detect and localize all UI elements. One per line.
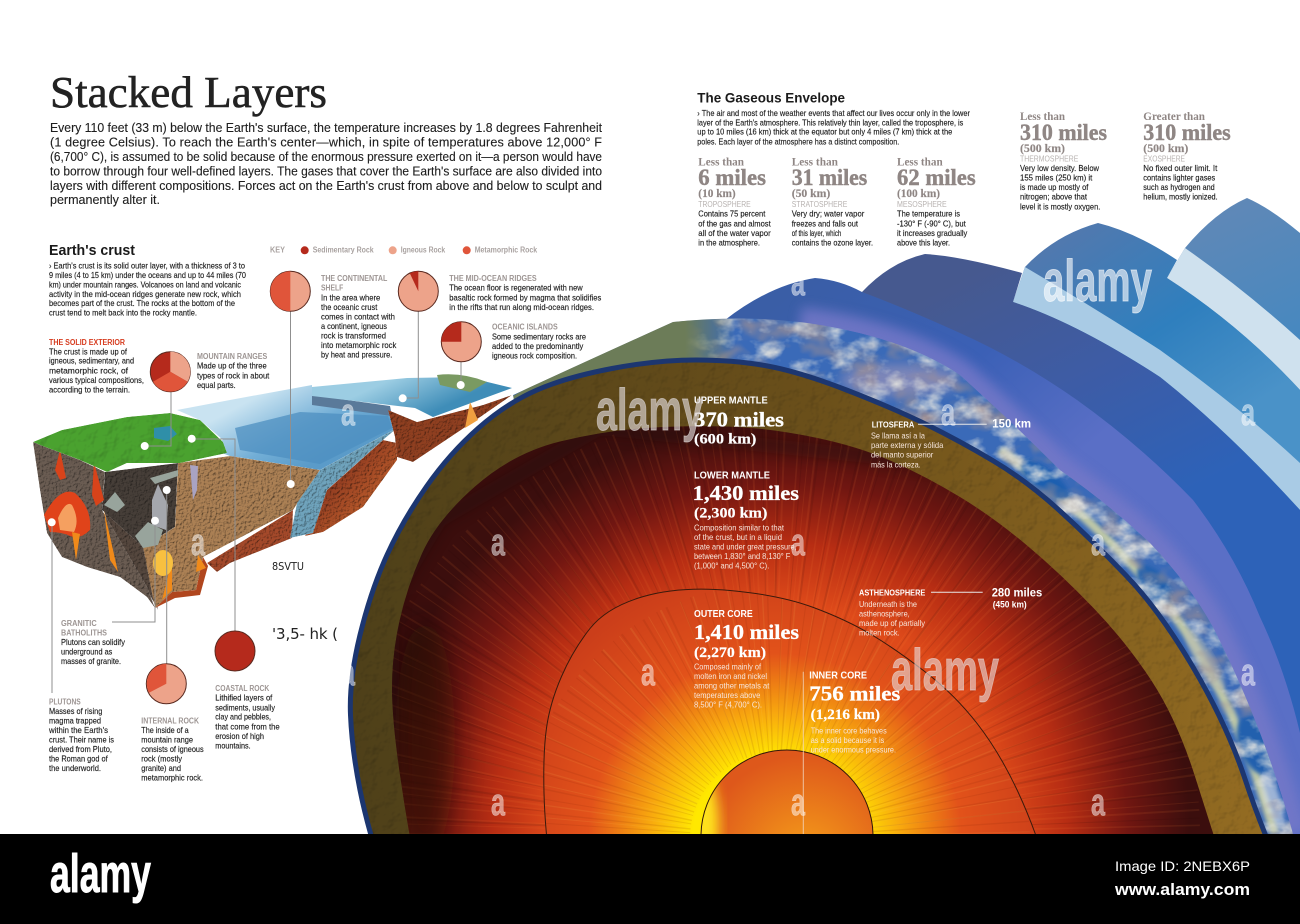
text: the solid exterior <box>49 338 144 394</box>
column: troposphere: in the atmosphere. <box>698 237 760 247</box>
label: asthenosphere: 280 miles <box>992 586 1043 600</box>
text: internal rock: granite) and <box>141 763 181 773</box>
label: litosfera: LITOSFERA <box>872 419 914 429</box>
watermark marks: a <box>341 392 356 434</box>
atmosphere layers <box>725 198 1300 834</box>
leader lines <box>52 311 461 693</box>
text: mountain ranges: types of rock in about <box>197 370 270 380</box>
text: internal rock: INTERNAL ROCK <box>141 716 199 725</box>
red rock underside <box>207 510 293 572</box>
label: lower mantle: of the crust, but in a liquid <box>694 532 782 542</box>
label: lower mantle: LOWER MANTLE <box>694 470 770 481</box>
label: asthenosphere: Underneath is the <box>859 599 917 609</box>
label: lower mantle: state and under great pressure, <box>694 542 797 552</box>
crust block illustration <box>33 374 512 610</box>
label: litosfera: más la corteza. <box>871 459 921 469</box>
label: asthenosphere: made up of partially <box>859 618 926 628</box>
text: gaseous envelope intro: up to 10 miles (16 km) thick at the equator but only 4 miles (7 km) thick at the <box>697 127 953 137</box>
pie: continental shelf <box>270 271 310 311</box>
atmosphere: thermosphere slice <box>1013 223 1300 463</box>
column: thermosphere: is made up mostly of <box>1020 182 1089 192</box>
column: thermosphere: (500 km) <box>1020 141 1065 155</box>
label: inner core: as a solid because it is <box>811 735 884 745</box>
column: mesosphere: above this layer. <box>897 237 950 247</box>
text: gaseous envelope intro <box>697 108 970 146</box>
text: internal rock <box>141 716 204 783</box>
text: internal rock: metamorphic rock. <box>141 773 203 783</box>
blue rim <box>350 360 1285 880</box>
label: upper mantle: 370 miles <box>694 408 784 432</box>
text: Earth's crust intro: 9 miles (4 to 15 km) under the oceans and up to 44 miles (70 <box>49 270 246 280</box>
text: Earth's crust intro: km) under mountain ranges. Volcanoes on land and volcanic <box>49 279 241 289</box>
text: the continental shelf: by heat and pressure. <box>321 350 392 360</box>
blue-gray shelf rim <box>290 428 397 538</box>
text: oceanic islands <box>492 323 586 361</box>
column: stratosphere: contains the ozone layer. <box>792 237 873 247</box>
key legend: Metamorphic Rock <box>475 246 538 255</box>
intro paragraph: permanently alter it. <box>50 193 160 207</box>
lake <box>154 426 177 441</box>
label: asthenosphere: asthenosphere, <box>859 609 910 619</box>
text: oceanic islands: igneous rock composition. <box>492 351 577 361</box>
text: coastal rock: clay and pebbles, <box>215 712 271 722</box>
text: granitic batholiths: GRANITIC <box>61 619 97 628</box>
atmosphere: exosphere light band <box>1167 248 1300 390</box>
watermark marks: a <box>1241 392 1256 434</box>
heading: the gaseous envelope: The Gaseous Envelope <box>697 89 845 105</box>
label: lower mantle: Composition similar to that <box>694 523 785 533</box>
intro paragraph <box>50 121 602 207</box>
granite slabs <box>104 465 198 548</box>
text: Earth's crust intro: crust tend to melt back into the rocky mantle. <box>49 308 197 318</box>
text: plutons <box>48 697 114 773</box>
label: inner core <box>803 671 900 834</box>
pie: mountain ranges <box>150 352 190 392</box>
inner core boundary line <box>700 750 874 834</box>
crust and upper mantle gold band <box>352 362 1262 834</box>
column: stratosphere: of this layer, which <box>792 228 842 238</box>
pie: oceanic islands <box>441 322 481 362</box>
watermark marks: a <box>791 782 806 824</box>
watermark marks: alamy <box>1043 249 1152 314</box>
text: the solid exterior: various typical compositions, <box>49 375 144 385</box>
column: mesosphere: (100 km) <box>897 186 940 200</box>
column: troposphere <box>698 156 771 247</box>
column: mesosphere: MESOSPHERE <box>897 200 947 209</box>
label: outer core: molten iron and nickel <box>694 671 767 681</box>
label: outer core: among other metals at <box>694 681 770 691</box>
watermark marks: a <box>641 652 656 694</box>
watermark marks: alamy <box>596 378 703 443</box>
text: the mid-ocean ridges: in the rifts that run along mid-ocean ridges. <box>449 302 594 312</box>
column: exosphere: Greater than <box>1143 111 1206 123</box>
tan sediment face <box>143 456 320 608</box>
text: the mid-ocean ridges: basaltic rock formed by magma that solidifies <box>449 292 601 302</box>
text: plutons: magma trapped <box>49 715 101 725</box>
text: oceanic islands: added to the predominantly <box>492 341 584 351</box>
heading: Earth's crust: Earth's crust <box>49 243 135 259</box>
text: the continental shelf: into metamorphic rock <box>321 340 397 350</box>
intro paragraph: Every 110 feet (33 m) below the Earth's surface, the temperature increases by 1.8 degrees Fahrenheit <box>50 121 602 135</box>
footer bar <box>0 834 1300 924</box>
text: internal rock: consists of igneous <box>141 744 204 754</box>
label: lower mantle: (2,300 km) <box>694 505 767 521</box>
text: mountain ranges: MOUNTAIN RANGES <box>197 352 268 361</box>
text: gaseous envelope intro: layer of the Earth's atmosphere. This relatively thin layer, called the troposphere, is <box>697 117 963 127</box>
outer core <box>544 590 1032 834</box>
pie: internal rock <box>146 664 186 704</box>
mantle <box>392 426 1214 834</box>
column: stratosphere: freezes and falls out <box>792 218 859 228</box>
text: coastal rock: sediments, usually <box>215 702 276 712</box>
earth cross-section <box>348 358 1268 834</box>
column: thermosphere <box>1020 111 1107 211</box>
atmosphere: stratosphere slice <box>725 278 1300 834</box>
second ocean dark strip <box>312 395 392 416</box>
column: troposphere: of the gas and almost <box>698 218 771 228</box>
label: upper mantle: (600 km) <box>694 431 756 447</box>
intro paragraph: (6,700° C), is assumed to be solid because of the enormous pressure exerted on it—a person would have <box>50 150 602 164</box>
second ocean block surface <box>312 377 512 417</box>
label: outer core: OUTER CORE <box>694 609 753 620</box>
watermark marks: a <box>341 652 356 694</box>
column: thermosphere: THERMOSPHERE <box>1020 154 1078 164</box>
text: plutons: the underworld. <box>49 763 101 773</box>
column: stratosphere: Very dry; water vapor <box>792 209 865 219</box>
label: lower mantle: between 1,830° and 8,130° F <box>694 551 790 561</box>
magma dikes <box>55 450 104 506</box>
intro paragraph: to borrow through four well-defined layers. The gases that cover the Earth's surface are also divided into <box>50 164 602 178</box>
text: plutons: within the Earth's <box>48 725 108 735</box>
label: outer core: (2,270 km) <box>694 645 766 661</box>
text: the continental shelf: comes in contact with <box>321 311 395 321</box>
watermark marks: a <box>791 262 806 304</box>
label: asthenosphere: (450 km) <box>993 599 1027 609</box>
label: litosfera: parte externa y sólida <box>871 440 944 450</box>
deeper ocean plate <box>235 412 392 464</box>
key legend: Igneous Rock <box>401 246 446 255</box>
column: thermosphere: nitrogen; above that <box>1020 192 1088 202</box>
label: inner core: under enormous pressure. <box>811 745 896 755</box>
watermark marks: a <box>491 782 506 824</box>
outer core boundary line <box>543 588 1036 834</box>
atmosphere: mesosphere slice <box>862 254 1300 732</box>
red rock under rim <box>305 440 397 536</box>
text: plutons: crust. Their name is <box>49 735 114 745</box>
text: granitic batholiths <box>61 619 126 666</box>
text: the solid exterior: The crust is made up of <box>49 346 128 356</box>
stray text 8SVTU: 8SVTU <box>272 560 304 573</box>
atmosphere: thermosphere light band <box>1013 267 1300 510</box>
text: granitic batholiths: masses of granite. <box>61 656 121 666</box>
label: upper mantle: UPPER MANTLE <box>694 395 768 406</box>
text: plutons: the Roman god of <box>49 754 108 764</box>
column: exosphere: EXOSPHERE <box>1143 154 1185 164</box>
text: plutons: derived from Pluto, <box>49 744 112 754</box>
column: troposphere: Less than <box>698 156 745 168</box>
column: troposphere: Contains 75 percent <box>698 209 766 219</box>
label: asthenosphere: molten rock. <box>859 628 900 638</box>
column: mesosphere: it increases gradually <box>897 228 968 238</box>
text: internal rock: mountain range <box>141 734 193 744</box>
text: granitic batholiths: Plutons can solidify <box>61 637 126 647</box>
text: granitic batholiths: underground as <box>61 646 112 656</box>
column: exosphere: 310 miles <box>1143 120 1231 145</box>
intro paragraph: (1 degree Celsius). To reach the Earth's center—which, in spite of temperatures above 12,000° F <box>50 136 602 150</box>
footer bar: Image ID: 2NEBX6P <box>1115 859 1250 874</box>
magma flames <box>72 510 206 600</box>
label: litosfera <box>871 417 1031 469</box>
text: gaseous envelope intro: › The air and most of the weather events that affect our lives occur only in the lower <box>697 108 970 118</box>
text: the continental shelf: rock is transformed <box>321 330 386 340</box>
text: coastal rock: Lithified layers of <box>215 693 273 703</box>
column: exosphere <box>1143 111 1231 202</box>
text: the mid-ocean ridges: The ocean floor is regenerated with new <box>449 283 584 293</box>
watermark marks: a <box>1241 652 1256 694</box>
column: stratosphere <box>792 156 873 247</box>
label: lower mantle: (1,000° and 4,500° C). <box>694 561 769 571</box>
earth surface <box>505 315 1300 835</box>
ridge magma <box>465 402 478 428</box>
text: the continental shelf: In the area where <box>321 292 381 302</box>
left rock face <box>33 442 155 608</box>
column: stratosphere: STRATOSPHERE <box>792 200 847 209</box>
watermark marks: alamy <box>891 638 999 703</box>
label: outer core: 8,500° F (4,700° C). <box>694 700 762 710</box>
label: upper mantle <box>694 395 784 447</box>
text: coastal rock: mountains. <box>215 740 251 750</box>
inner core <box>702 750 872 834</box>
text: the solid exterior: metamorphic rock, of <box>49 365 129 375</box>
column: thermosphere: 155 miles (250 km) it <box>1020 172 1093 182</box>
column: exosphere: helium, mostly ionized. <box>1143 192 1218 202</box>
watermark marks <box>191 249 1256 824</box>
text: the continental shelf: THE CONTINENTAL <box>321 274 387 283</box>
key legend: KEY <box>270 246 286 255</box>
key legend <box>270 246 538 255</box>
watermark marks: a <box>491 522 506 564</box>
column: thermosphere: 310 miles <box>1020 120 1107 145</box>
island <box>437 374 487 392</box>
column: exosphere: No fixed outer limit. It <box>1143 163 1218 173</box>
column: troposphere: TROPOSPHERE <box>698 200 751 209</box>
text: the continental shelf <box>321 274 397 360</box>
pointer dots <box>48 382 464 526</box>
text: Earth's crust intro <box>49 260 246 318</box>
text: granitic batholiths: BATHOLITHS <box>61 628 108 637</box>
text: the continental shelf: SHELF <box>321 284 343 293</box>
column: exosphere: contains lighter gases <box>1143 172 1215 182</box>
column: thermosphere: level it is mostly oxygen. <box>1020 201 1100 211</box>
green land surface <box>33 413 227 472</box>
text: the solid exterior: THE SOLID EXTERIOR <box>49 338 125 347</box>
text: the mid-ocean ridges: THE MID-OCEAN RIDGES <box>449 274 537 283</box>
dark granitic interior <box>102 463 178 547</box>
label: litosfera: Se llama así a la <box>871 430 925 440</box>
text: coastal rock: COASTAL ROCK <box>215 684 269 693</box>
column: troposphere: all of the water vapor <box>698 228 771 238</box>
label: asthenosphere: ASTHENOSPHERE <box>859 587 926 597</box>
text: the mid-ocean ridges <box>449 274 601 312</box>
text: the solid exterior: igneous, sedimentary, and <box>49 356 134 366</box>
text: the solid exterior: according to the terrain. <box>49 384 130 394</box>
text: Earth's crust intro: becomes part of the crust. The rocks at the bottom of the <box>49 298 235 308</box>
text: internal rock: rock (mostly <box>141 754 183 764</box>
column: mesosphere <box>897 156 976 247</box>
label: outer core: Composed mainly of <box>694 662 762 672</box>
footer bar: alamy <box>50 844 151 904</box>
text: Earth's crust intro: activity in the mid-ocean ridges generate new rock, which <box>49 289 241 299</box>
column: stratosphere: 31 miles <box>792 165 867 190</box>
text: oceanic islands: OCEANIC ISLANDS <box>492 323 558 332</box>
column: exosphere: (500 km) <box>1143 141 1188 155</box>
stray text hk: '3,5- hk ( <box>272 625 338 643</box>
atmosphere: troposphere glow <box>800 322 1293 834</box>
magma chamber core <box>58 504 77 532</box>
column: mesosphere: 62 miles <box>897 165 976 190</box>
text: internal rock: The inside of a <box>141 725 189 735</box>
label: inner core: INNER CORE <box>809 671 867 682</box>
column: mesosphere: -130° F (-90° C), but <box>897 218 966 228</box>
text: Earth's crust intro: › Earth's crust is its solid outer layer, with a thickness of 3 to <box>49 260 245 270</box>
atmosphere: exosphere slice <box>1167 198 1300 390</box>
text: mountain ranges: equal parts. <box>197 380 236 390</box>
wedge bottom edge <box>155 557 208 608</box>
pie: mid-ocean ridges <box>398 271 438 311</box>
watermark marks: a <box>941 392 956 434</box>
label: lower mantle: 1,430 miles <box>693 481 799 505</box>
text: mountain ranges <box>197 352 270 390</box>
watermark marks: a <box>791 522 806 564</box>
dark rock behind wedge <box>102 505 158 610</box>
label: lower mantle <box>693 470 799 571</box>
watermark marks: a <box>191 522 206 564</box>
column: stratosphere: (50 km) <box>792 186 830 200</box>
column: stratosphere: Less than <box>792 156 839 168</box>
pie: coastal rock <box>215 631 255 671</box>
watermark marks: a <box>1091 782 1106 824</box>
text: plutons: PLUTONS <box>49 697 81 706</box>
column: mesosphere: Less than <box>897 156 943 168</box>
text: coastal rock <box>215 684 280 750</box>
label: asthenosphere <box>859 586 1043 638</box>
column: mesosphere: The temperature is <box>897 209 960 219</box>
label: outer core <box>694 609 799 710</box>
label: litosfera: 150 km <box>992 417 1031 431</box>
label: inner core: (1,216 km) <box>811 707 880 723</box>
text: coastal rock: that come from the <box>215 721 280 731</box>
label: outer core: temperatures above <box>694 690 761 700</box>
column: troposphere: (10 km) <box>698 186 736 200</box>
text: the continental shelf: a continent, igneous <box>321 321 387 331</box>
text: gaseous envelope intro: poles. Each layer of the atmosphere has a distinct composition. <box>697 136 899 146</box>
text: plutons: Masses of rising <box>49 706 103 716</box>
yellow magma drop <box>153 550 173 576</box>
key legend: Sedimentary Rock <box>313 246 374 255</box>
second block red rock <box>388 395 512 462</box>
watermark marks: a <box>1091 522 1106 564</box>
text: coastal rock: erosion of high <box>215 731 264 741</box>
text: oceanic islands: Some sedimentary rocks are <box>492 331 586 341</box>
column: thermosphere: Less than <box>1020 111 1066 123</box>
title: Stacked Layers <box>50 68 327 117</box>
magma chamber <box>44 492 90 537</box>
label: litosfera: del manto superior <box>871 450 934 460</box>
shallow ocean surface <box>177 385 397 470</box>
label: inner core: The inner core behaves <box>811 726 887 736</box>
column: troposphere: 6 miles <box>698 165 766 190</box>
intro paragraph: layers with different compositions. Forces act on the Earth's crust from above and below to sculpt and <box>50 179 602 193</box>
label: inner core: 756 miles <box>809 682 900 706</box>
text: mountain ranges: Made up of the three <box>197 361 267 371</box>
footer bar: www.alamy.com <box>1114 881 1250 899</box>
column: thermosphere: Very low density. Below <box>1020 163 1100 173</box>
column: exosphere: such as hydrogen and <box>1143 182 1215 192</box>
label: outer core: 1,410 miles <box>694 620 799 644</box>
text: the continental shelf: the oceanic crust <box>321 302 378 312</box>
